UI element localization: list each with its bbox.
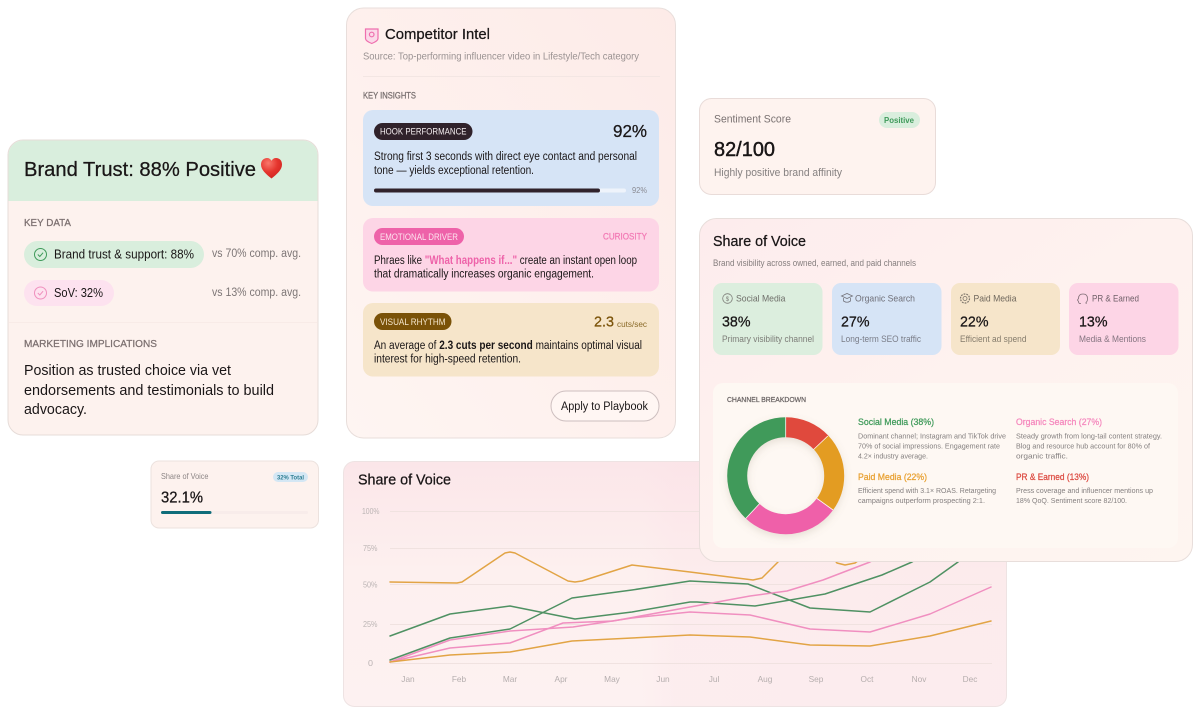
- x axis month labels: Feb: [452, 674, 467, 684]
- insight: emotional driver: [363, 218, 659, 292]
- donut chart: [737, 417, 834, 524]
- panel: sentiment score: [700, 98, 936, 194]
- x axis month labels: May: [604, 674, 621, 684]
- line series: [390, 530, 991, 662]
- panel: channel breakdown: CHANNEL BREAKDOWN: [727, 397, 806, 404]
- pill: brand trust and support: [24, 241, 204, 268]
- panel: share of voice mini stat: 32.1%: [161, 490, 203, 506]
- legend: paid media: Paid Media (22%): [858, 472, 927, 482]
- legend: organic search: Blog and resource hub account for 80% of: [1016, 442, 1151, 450]
- legend: social media: 70% of social impressions. Engagement rate: [858, 442, 1000, 450]
- legend: organic search: Organic Search (27%): [1016, 417, 1102, 427]
- x axis month labels: Dec: [963, 674, 977, 684]
- panel: brand trust: [8, 140, 318, 435]
- x axis month labels: Jun: [656, 674, 670, 684]
- tile: social media: $: [726, 297, 730, 303]
- tile: organic search: 27%: [841, 314, 870, 330]
- legend: organic search: organic traffic.: [1016, 452, 1068, 460]
- x axis month labels: Jul: [709, 674, 719, 684]
- legend: social media: Social Media (38%): [858, 417, 934, 427]
- panel: share of voice mini stat: [151, 461, 318, 528]
- brand trust header band: [8, 140, 318, 201]
- comparison: 13% average: vs 13% comp. avg.: [212, 287, 301, 299]
- badge: 32% total: 32% Total: [277, 474, 304, 481]
- label: key insights: KEY INSIGHTS: [363, 90, 416, 100]
- pill: share of voice: SoV: 32%: [54, 286, 103, 300]
- text: marketing implications body: endorsements and testimonials to build: [24, 382, 274, 399]
- progress bar: [161, 511, 308, 514]
- tile: organic search: Long-term SEO traffic: [841, 334, 922, 344]
- text: marketing implications body: Position as trusted choice via vet: [24, 362, 232, 379]
- insight: hook performance: Strong first 3 seconds with direct eye contact and personal: [374, 151, 637, 163]
- button: apply to playbook: Apply to Playbook: [561, 401, 648, 413]
- heading: brand trust: Brand Trust: 88% Positive: [24, 158, 256, 181]
- y axis labels: 0: [368, 658, 373, 668]
- legend: social media: Dominant channel; Instagram and TikTok drive: [858, 432, 1006, 440]
- icon: heart: [261, 158, 282, 178]
- badge: 32% total: [273, 472, 308, 482]
- x axis month labels: Sep: [809, 674, 824, 684]
- insight: hook performance: 92%: [632, 186, 647, 195]
- tile: pr and earned: 13%: [1079, 314, 1108, 330]
- panel: competitor intel: [346, 8, 676, 438]
- badge: positive: Positive: [884, 116, 915, 125]
- tile: social media: 38%: [722, 314, 750, 330]
- button: apply to playbook: [551, 391, 659, 421]
- insight: visual rhythm: cuts/sec: [617, 320, 647, 329]
- legend: pr and earned: 18% QoQ. Sentiment score 82/100.: [1016, 496, 1127, 505]
- y axis labels: 50%: [363, 580, 378, 590]
- y axis labels: 100%: [362, 506, 380, 516]
- insight: visual rhythm: 2.3: [594, 314, 614, 330]
- x axis month labels: Apr: [555, 674, 568, 684]
- x axis month labels: Jan: [401, 674, 415, 684]
- legend: social media: 4.2× industry average.: [858, 452, 928, 460]
- pill: share of voice: [24, 280, 114, 306]
- tile: pr and earned: [1069, 283, 1178, 355]
- tile: pr and earned: Media & Mentions: [1079, 334, 1147, 344]
- source note: Source: Top-performing influencer video in Lifestyle/Tech category: [363, 52, 640, 62]
- tile: paid media: [951, 283, 1060, 355]
- heading: share of voice chart: Share of Voice: [358, 472, 451, 488]
- insight: emotional driver: Phraes like "What happens if..." create an instant open loop: [374, 255, 637, 267]
- legend: pr and earned: Press coverage and influencer mentions up: [1016, 486, 1153, 495]
- insight: visual rhythm: An average of 2.3 cuts per second maintains optimal visual: [374, 340, 642, 352]
- tile: social media: [713, 283, 822, 355]
- x axis month labels: Nov: [912, 674, 927, 684]
- insight: emotional driver: that dramatically increases organic engagement.: [374, 268, 594, 280]
- comparison: 70% average: vs 70% comp. avg.: [212, 248, 301, 260]
- pill: brand trust and support: Brand trust & support: 88%: [54, 248, 194, 262]
- x axis month labels: [401, 674, 977, 684]
- legend: pr and earned: [1016, 472, 1153, 505]
- tile: paid media: Efficient ad spend: [960, 334, 1027, 344]
- x axis month labels: Aug: [758, 674, 773, 684]
- tile: organic search: Organic Search: [855, 294, 915, 304]
- panel: share of voice mini stat: Share of Voice: [161, 471, 209, 481]
- tile: social media: Primary visibility channel: [722, 334, 814, 344]
- icon: shield: [366, 29, 378, 44]
- insight: emotional driver: CURIOSITY: [603, 232, 647, 242]
- x axis month labels: Mar: [503, 674, 517, 684]
- insight: hook performance: HOOK PERFORMANCE: [380, 127, 467, 137]
- insight: hook performance: [363, 110, 659, 206]
- tile: organic search: [832, 283, 942, 355]
- legend: paid media: campaigns outperform prospecting 2:1.: [858, 496, 985, 505]
- label: marketing implications: MARKETING IMPLICATIONS: [24, 338, 157, 350]
- legend: organic search: [1016, 417, 1162, 460]
- insight: visual rhythm: VISUAL RHYTHM: [380, 317, 446, 327]
- panel: sentiment score: Sentiment Score: [714, 114, 791, 126]
- text: marketing implications body: advocacy.: [24, 401, 87, 418]
- legend: paid media: [858, 472, 996, 505]
- panel: share of voice channels: Brand visibility across owned, earned, and paid channels: [713, 258, 917, 268]
- legend: pr and earned: PR & Earned (13%): [1016, 472, 1089, 482]
- heading: share of voice: Share of Voice: [713, 233, 806, 250]
- panel: channel breakdown: [713, 383, 1178, 548]
- text: marketing implications body: [24, 362, 274, 418]
- badge: positive: [879, 112, 920, 128]
- tile: social media: Social Media: [736, 294, 786, 304]
- y axis labels: 25%: [363, 619, 378, 629]
- panel: share of voice channels: [700, 218, 1192, 562]
- heading: competitor intel: Competitor Intel: [385, 26, 490, 43]
- legend: social media: [858, 417, 1006, 460]
- y axis labels: [362, 506, 380, 668]
- panel: sentiment score: Highly positive brand affinity: [714, 167, 843, 179]
- insight: visual rhythm: [363, 303, 659, 376]
- tile: paid media: 22%: [960, 314, 988, 330]
- y axis labels: 75%: [363, 543, 378, 553]
- legend: paid media: Efficient spend with 3.1× ROAS. Retargeting: [858, 486, 996, 495]
- tile: paid media: Paid Media: [974, 294, 1017, 304]
- insight: hook performance: 92%: [613, 121, 647, 141]
- x axis month labels: Oct: [861, 674, 874, 684]
- value: 82/100: 82/100: [714, 138, 775, 161]
- insight: emotional driver: EMOTIONAL DRIVER: [380, 232, 458, 242]
- tile: pr and earned: PR & Earned: [1092, 294, 1139, 304]
- insight: hook performance: tone — yields exceptional retention.: [374, 165, 534, 177]
- insight: visual rhythm: interest for high-speed retention.: [374, 354, 521, 366]
- legend: organic search: Steady growth from long-tail content strategy.: [1016, 432, 1162, 440]
- panel: share of voice line chart: [344, 462, 1006, 706]
- label: key data: KEY DATA: [24, 217, 71, 229]
